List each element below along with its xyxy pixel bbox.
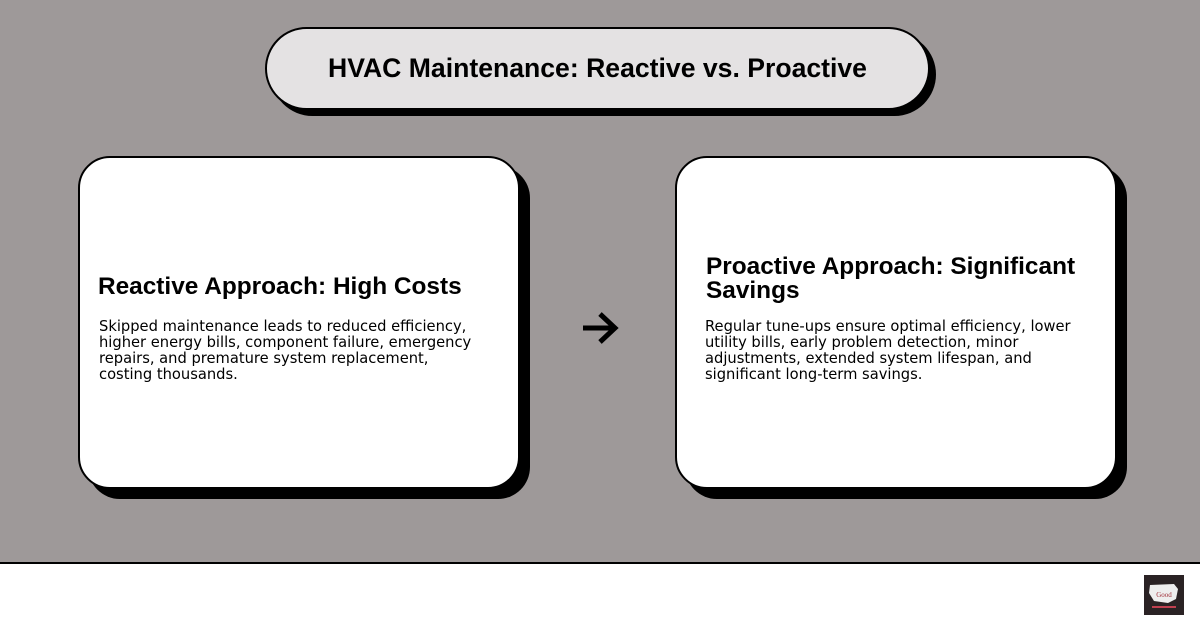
- heading: proactive: Proactive Approach: Significant: [706, 253, 1075, 280]
- text: reactive: [99, 318, 471, 383]
- text: proactive: Regular tune-ups ensure optimal efficiency, lower: [705, 318, 1071, 335]
- logo: Good: [1156, 591, 1172, 599]
- panel: proactive: [675, 156, 1117, 489]
- heading: proactive: [706, 253, 1075, 304]
- text: proactive: significant long-term savings.: [705, 366, 922, 383]
- text: proactive: utility bills, early problem detection, minor: [705, 334, 1018, 351]
- text: proactive: [705, 318, 1071, 383]
- text: reactive: Skipped maintenance leads to reduced efficiency,: [99, 318, 466, 335]
- logo: [1144, 575, 1184, 615]
- text: reactive: repairs, and premature system replacement,: [99, 350, 428, 367]
- heading: reactive: Reactive Approach: High Costs: [98, 273, 462, 300]
- title: [265, 27, 930, 110]
- text: reactive: higher energy bills, component failure, emergency: [99, 334, 471, 351]
- text: reactive: costing thousands.: [99, 366, 238, 383]
- title: HVAC Maintenance: Reactive vs. Proactive: [328, 53, 867, 83]
- panel: reactive: [78, 156, 520, 489]
- heading: proactive: Savings: [706, 277, 800, 304]
- text: proactive: adjustments, extended system lifespan, and: [705, 350, 1032, 367]
- arrow: [583, 312, 618, 344]
